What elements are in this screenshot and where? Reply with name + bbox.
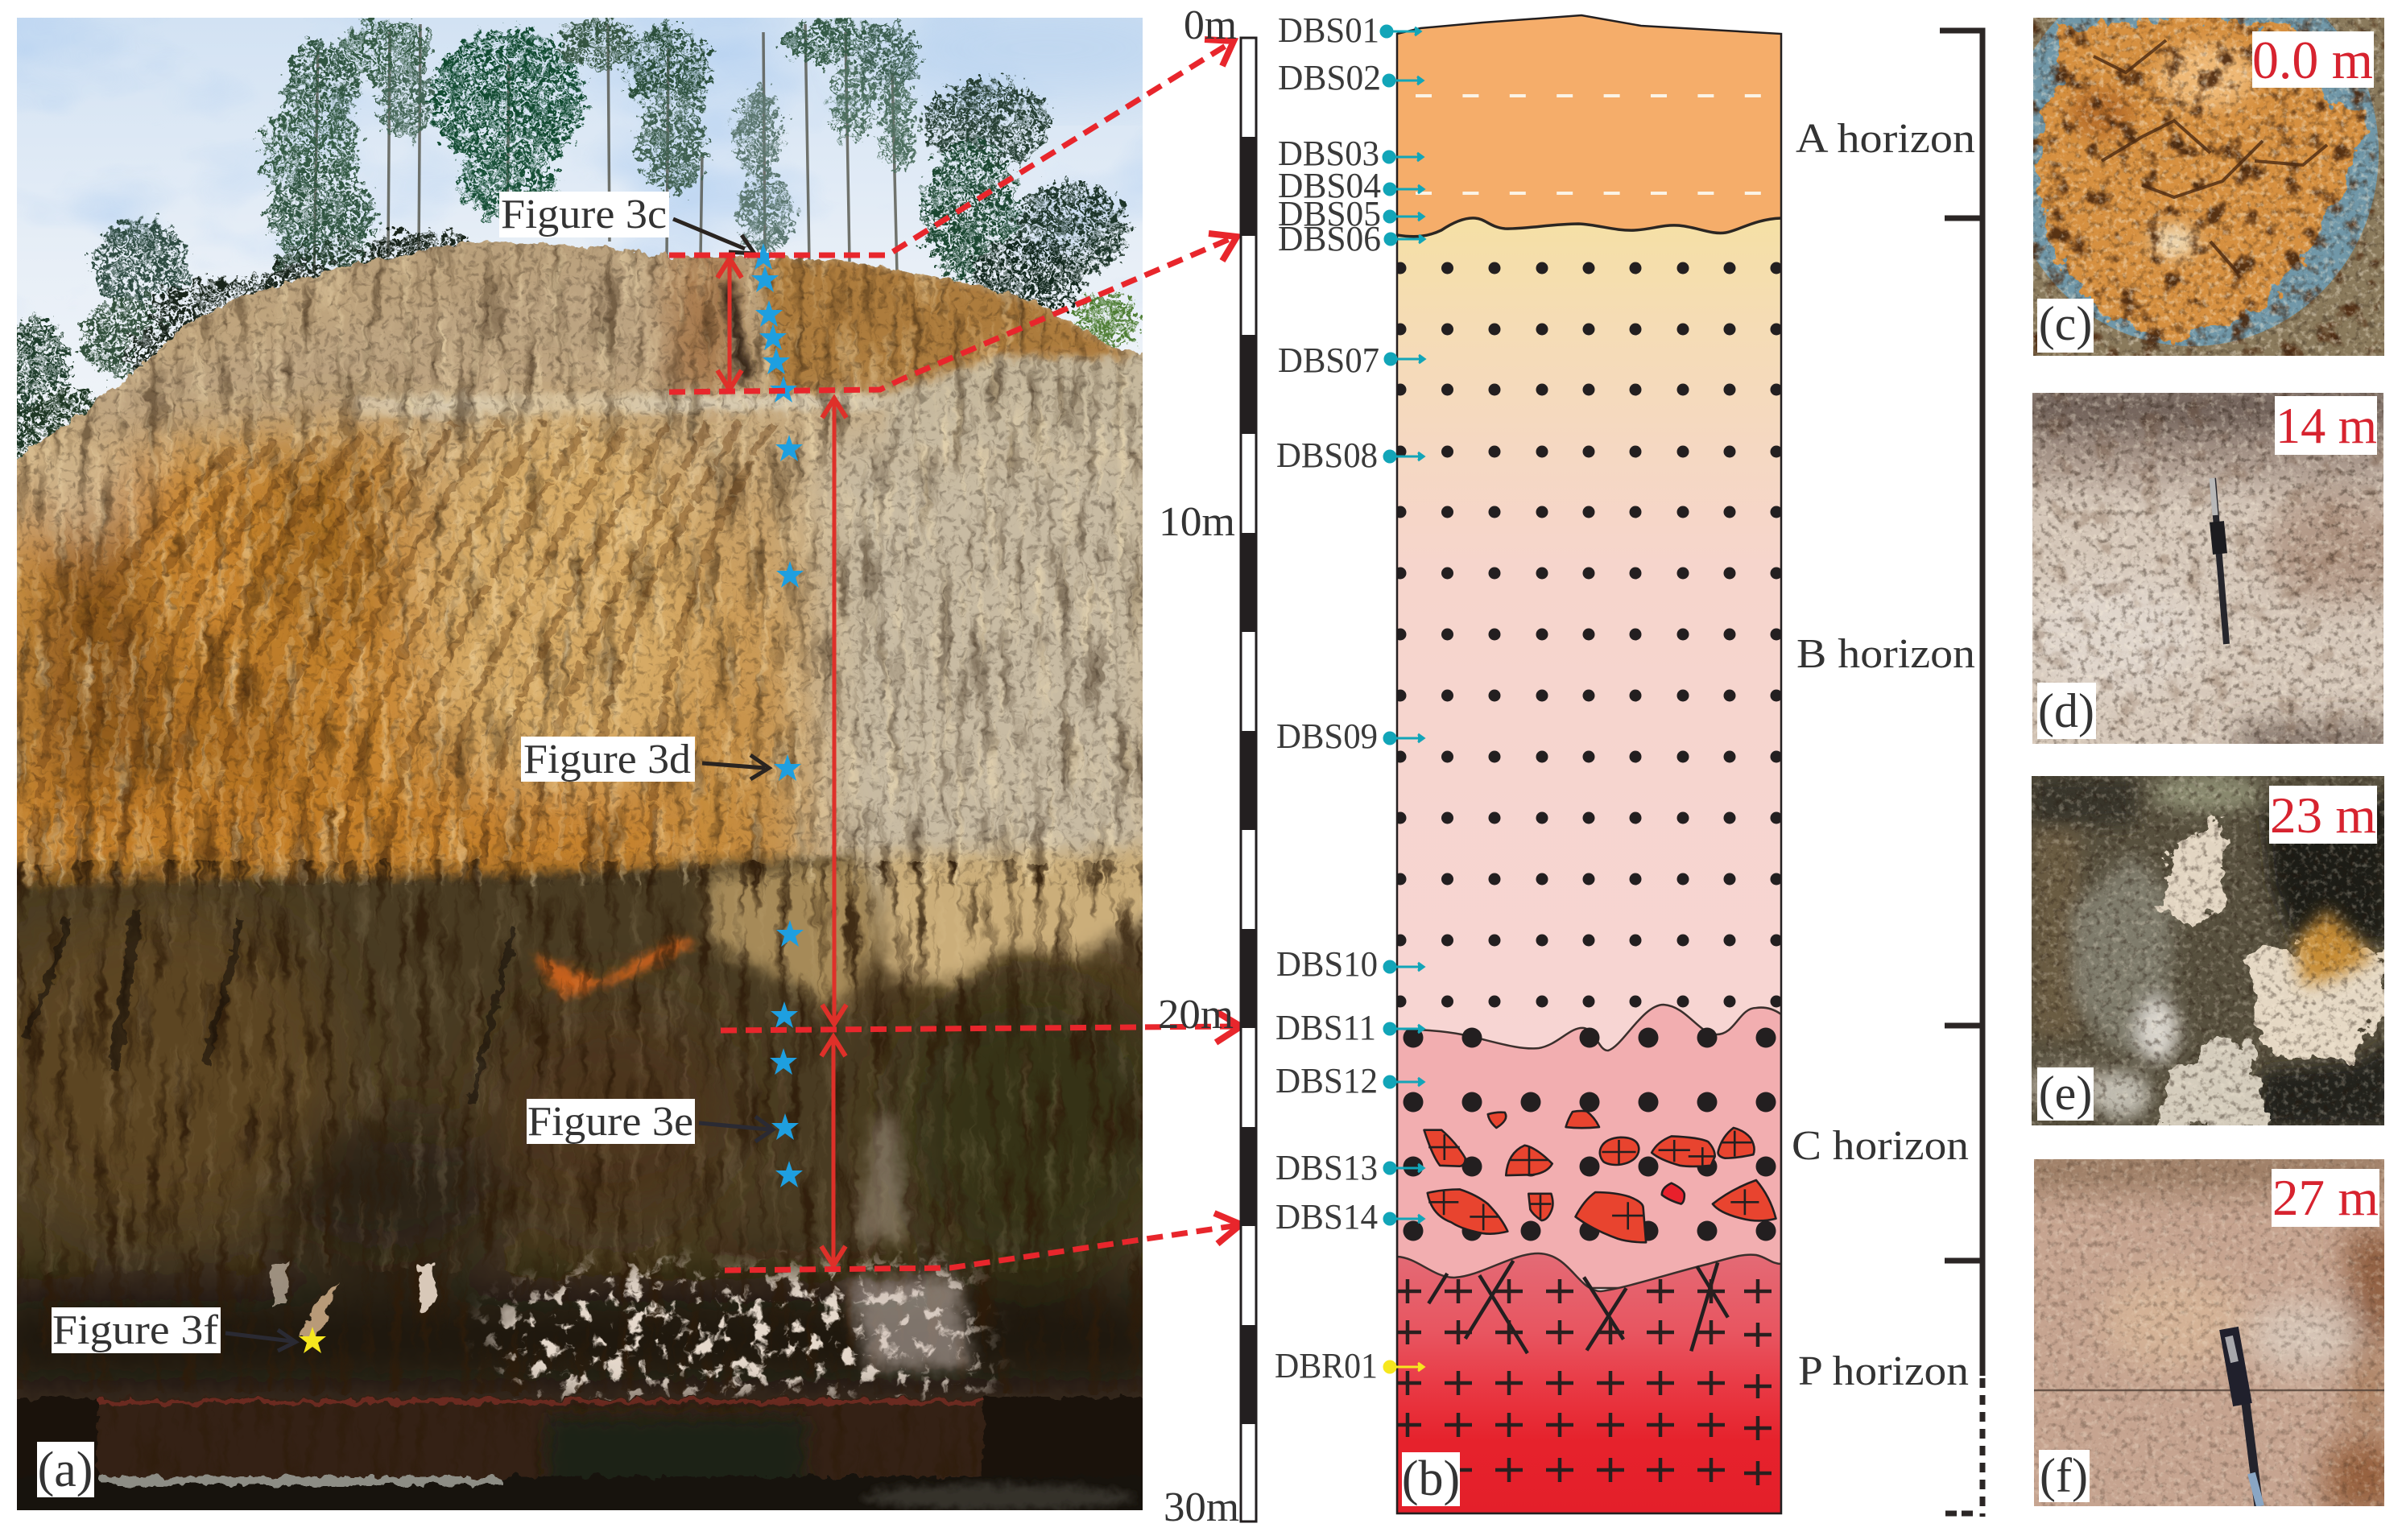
sample labels: DBS12	[1275, 1061, 1378, 1100]
P horizon fractures	[1428, 1261, 1728, 1353]
horizon labels: B horizon	[1796, 631, 1975, 677]
dashed connector: surface to 0 m	[669, 39, 1234, 255]
sample labels: DBS11	[1275, 1008, 1376, 1047]
double arrows: horizon thickness	[717, 258, 846, 1265]
horizon labels: P horizon	[1798, 1348, 1969, 1394]
sample star: yellow bedrock sample	[299, 1327, 326, 1353]
P horizon fill	[1397, 1253, 1781, 1513]
panel e: 23 m rock photo	[2021, 774, 2392, 1127]
callout: Figure 3c	[499, 192, 755, 254]
sample labels: DBS10	[1276, 944, 1378, 984]
depth label 14 m: 14 m	[2276, 397, 2377, 454]
panel f: 27 m bedrock photo	[2013, 1147, 2400, 1513]
photo tree crowns	[0, 16, 1137, 479]
callout: Figure 3c: Figure 3c	[501, 192, 667, 237]
depth label 27 m: 27 m	[2272, 1169, 2379, 1226]
surface streaks	[0, 242, 1184, 886]
photo sky	[17, 18, 1143, 459]
column outline	[1397, 15, 1781, 1513]
panel a: field photo of the weathering profile	[0, 0, 1241, 1540]
panel c: 0.0 m soil photo	[2005, 0, 2384, 356]
sample labels: DBS05	[1278, 194, 1381, 233]
pale weathered blobs	[2158, 824, 2384, 1125]
panel b: soil profile column	[1275, 10, 1783, 1513]
pale shelf at the A/B boundary	[354, 355, 1184, 451]
sample labels: DBS09	[1276, 716, 1378, 756]
sample labels: DBS03	[1278, 134, 1379, 173]
ground and pipe	[0, 1476, 1184, 1540]
orange soil clump	[2037, 19, 2367, 336]
label (e): (e)	[2039, 1067, 2092, 1120]
dark cracks in the lower band	[24, 910, 515, 1103]
C horizon fill	[1397, 1005, 1781, 1288]
brick retaining wall	[0, 1398, 1184, 1510]
sample labels: DBS07	[1278, 341, 1379, 380]
orange-brown soil block right of gully	[761, 256, 1135, 391]
dark gully	[721, 282, 753, 385]
scale labels	[1158, 2, 1239, 1530]
depth label 23 m: 23 m	[2270, 787, 2376, 844]
photo panel label (a): (a)	[38, 1443, 93, 1497]
scale labels: 30m	[1164, 1484, 1239, 1530]
sample labels: DBS01	[1278, 10, 1379, 50]
soil highlights	[2069, 44, 2255, 258]
B horizon dot pattern	[1395, 262, 1783, 1008]
depth scale bar	[1158, 2, 1256, 1530]
dashed connector: A/B boundary	[669, 233, 1237, 392]
scale labels: 20m	[1158, 992, 1234, 1038]
sample stars: blue soil samples	[750, 243, 804, 1187]
pen	[2212, 478, 2226, 644]
dashed connector: C/P boundary	[725, 1213, 1241, 1270]
sample labels: DBS08	[1276, 436, 1378, 475]
callout: Figure 3d	[521, 737, 769, 782]
B horizon fill	[1397, 209, 1781, 1063]
scale labels: 10m	[1159, 499, 1235, 545]
panel d: 14 m saprolite photo	[2013, 378, 2402, 753]
A/B boundary	[1397, 218, 1781, 237]
fine rock grain	[0, 242, 1184, 886]
pen	[2229, 1328, 2260, 1506]
label (c): (c)	[2039, 297, 2092, 350]
sample labels: DBS13	[1275, 1148, 1378, 1187]
horizon brackets	[1940, 31, 1982, 1517]
horizon labels	[1792, 116, 1975, 1394]
panel label (b): (b)	[1402, 1451, 1460, 1506]
orange stain	[2295, 910, 2375, 986]
sample labels: DBR01	[1275, 1346, 1378, 1385]
label (f): (f)	[2040, 1449, 2088, 1502]
horizon labels: C horizon	[1792, 1123, 1969, 1169]
C horizon dots	[1403, 1027, 1776, 1241]
curved erosion rills	[32, 423, 773, 861]
sample labels: DBS02	[1278, 58, 1381, 97]
photo rock face	[0, 233, 1184, 1540]
A horizon fill	[1397, 15, 1781, 237]
scale labels: 0m	[1184, 2, 1237, 48]
callout: Figure 3f	[52, 1307, 296, 1353]
upper band colour patches	[81, 250, 737, 435]
white dashed layers in A horizon	[1416, 96, 1762, 193]
callout: Figure 3e: Figure 3e	[527, 1099, 693, 1145]
P horizon plus pattern	[1394, 1279, 1772, 1485]
sample labels: DBS06	[1278, 219, 1381, 258]
bedrock sample marker	[1384, 1361, 1424, 1373]
sample markers	[1381, 26, 1424, 1224]
horizon labels: A horizon	[1796, 116, 1975, 162]
orange stain in the dark band	[531, 938, 697, 998]
callout: Figure 3d: Figure 3d	[523, 737, 691, 782]
lit blocks at the band boundary	[709, 845, 1184, 1014]
callout: Figure 3e	[527, 1099, 773, 1145]
collecting plate	[2005, 0, 2379, 346]
dashed connector: B/C boundary	[721, 1012, 1241, 1042]
soil cracks	[2094, 40, 2327, 274]
label (d): (d)	[2038, 684, 2094, 737]
sample labels	[1275, 10, 1381, 1385]
white weathered patches	[271, 1115, 1015, 1417]
depth label 0.0 m: 0.0 m	[2252, 31, 2373, 90]
sample labels: DBS04	[1278, 166, 1381, 205]
dark-band shoulder	[0, 855, 1184, 1540]
C horizon corestones	[1424, 1111, 1776, 1242]
photo tree trunks	[314, 24, 897, 274]
callout: Figure 3f: Figure 3f	[52, 1307, 219, 1353]
sample labels: DBS14	[1275, 1197, 1378, 1237]
middle band colour patches	[16, 419, 1184, 902]
